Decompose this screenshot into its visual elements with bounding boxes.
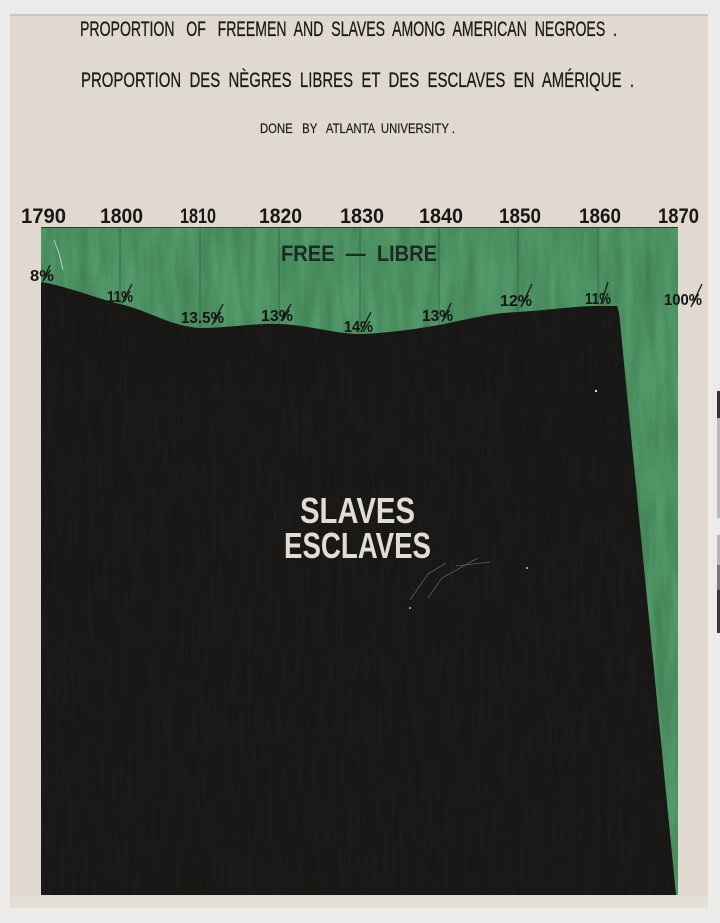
area: free (green watercolour) bbox=[41, 227, 678, 895]
year axis labels: 1870 bbox=[658, 205, 699, 228]
percentage labels: 13% bbox=[261, 308, 293, 325]
percentage labels: 11% bbox=[585, 291, 611, 308]
year axis labels bbox=[21, 205, 699, 228]
percentage labels: 8% bbox=[30, 268, 54, 285]
percentage labels: 11% bbox=[107, 289, 133, 306]
mat shadow edge bbox=[10, 14, 708, 16]
label: esclaves: ESCLAVES bbox=[284, 525, 431, 566]
label: free / libre: FREE — LIBRE bbox=[281, 241, 437, 266]
year axis labels: 1860 bbox=[579, 205, 621, 228]
year axis labels: 1830 bbox=[340, 205, 384, 228]
year axis labels: 1800 bbox=[100, 205, 143, 228]
credit line: DONE BY ATLANTA UNIVERSITY . bbox=[260, 120, 455, 136]
area: slaves (black) bbox=[41, 280, 678, 896]
percent slash strokes bbox=[43, 265, 702, 332]
percentage labels: 12% bbox=[500, 293, 532, 310]
edge of neighbouring frame bbox=[717, 391, 720, 633]
year axis labels: 1840 bbox=[419, 205, 463, 228]
percentage labels: 13.5% bbox=[181, 310, 224, 327]
year axis labels: 1790 bbox=[21, 205, 66, 228]
year axis labels: 1810 bbox=[180, 205, 216, 228]
percentage labels: 13% bbox=[422, 308, 453, 325]
lower mat band bbox=[10, 896, 708, 908]
year axis labels: 1820 bbox=[259, 205, 302, 228]
percentage labels: 14% bbox=[344, 319, 373, 336]
year axis labels: 1850 bbox=[499, 205, 541, 228]
percentage labels: 100% bbox=[664, 292, 702, 309]
label: slaves: SLAVES bbox=[300, 490, 415, 531]
percentage labels bbox=[30, 268, 702, 336]
